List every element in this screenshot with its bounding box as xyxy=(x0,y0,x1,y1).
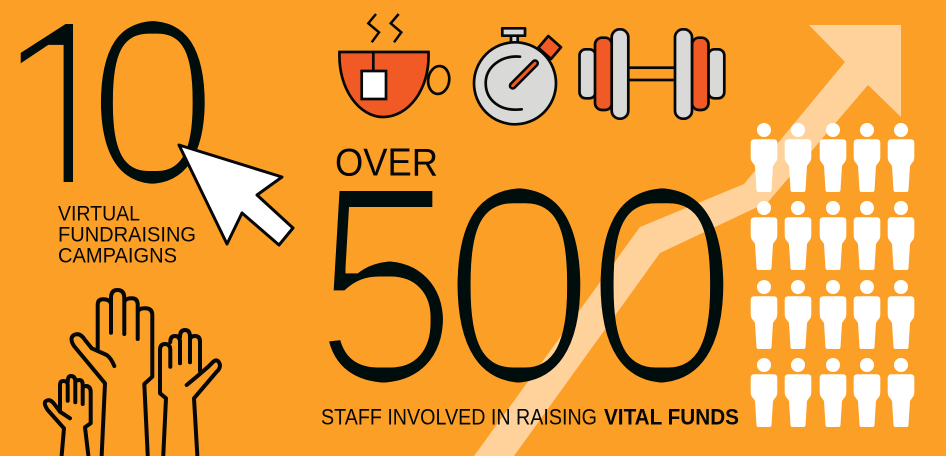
cup bowl xyxy=(339,52,429,117)
bar xyxy=(626,68,677,80)
steam xyxy=(368,14,401,42)
tea bag xyxy=(372,52,375,71)
left plates xyxy=(580,49,596,98)
caption: virtual fundraising campaigns: VIRTUAL xyxy=(58,203,140,226)
inner dial arc xyxy=(486,57,522,110)
icon: mouse cursor xyxy=(179,145,293,245)
caption: virtual fundraising campaigns xyxy=(58,203,196,268)
right hand xyxy=(160,330,220,455)
growth arrow xyxy=(474,25,901,456)
icon: stopwatch xyxy=(474,28,561,124)
people grid xyxy=(751,123,914,427)
large hand xyxy=(72,290,152,455)
big number: 10 xyxy=(20,21,205,184)
big number: 500: 5 xyxy=(311,128,460,443)
big number: 500 xyxy=(311,128,740,443)
caption: virtual fundraising campaigns: FUNDRAISING xyxy=(58,224,196,247)
icon: tea cup xyxy=(339,14,451,117)
big number: 500: 0 xyxy=(440,128,597,442)
cup handle xyxy=(426,65,451,95)
side button xyxy=(538,36,561,59)
right plates xyxy=(708,49,724,98)
watch face xyxy=(474,42,556,124)
caption: staff involved in raising vital funds: VITAL FUNDS xyxy=(604,405,739,430)
label: over: OVER xyxy=(335,142,438,185)
caption: staff involved in raising vital funds: STAFF INVOLVED IN RAISING xyxy=(321,405,597,430)
caption: virtual fundraising campaigns: CAMPAIGNS xyxy=(58,245,177,268)
big number: 500: 0 xyxy=(584,128,740,442)
icon: raised hands xyxy=(45,290,220,455)
watch hand xyxy=(513,63,535,86)
top button xyxy=(511,36,518,45)
icon: dumbbell xyxy=(580,29,724,119)
small hand xyxy=(45,376,91,455)
